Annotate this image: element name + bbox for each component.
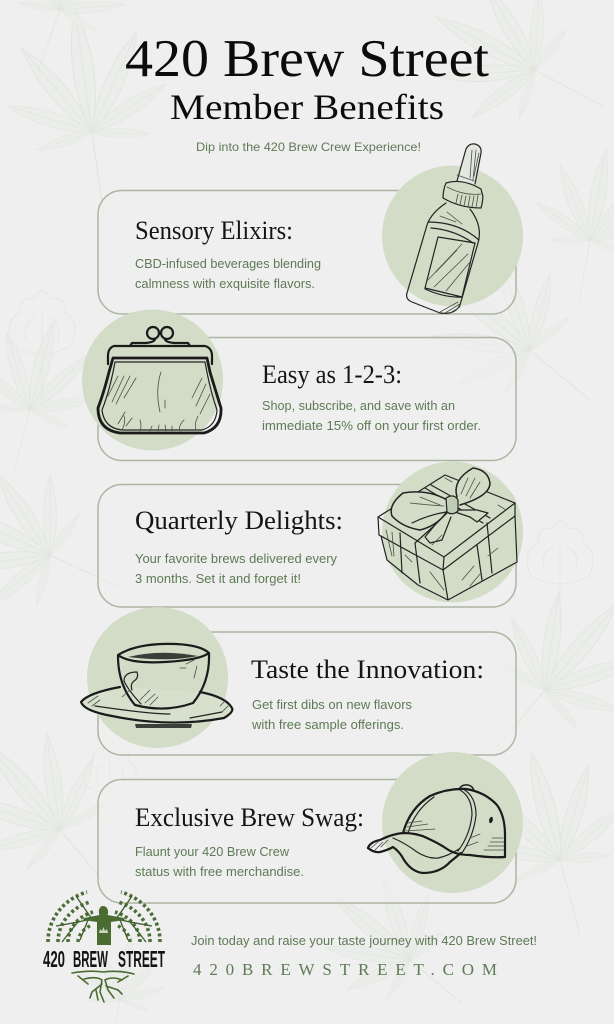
icon circle bbox=[87, 607, 228, 748]
description: with free sample offerings. bbox=[251, 718, 404, 732]
panel: Easy as 1-2-3 bbox=[82, 310, 516, 460]
description: calmness with exquisite flavors. bbox=[135, 277, 315, 291]
card outline bbox=[98, 484, 516, 607]
website url: 420BREWSTREET.COM bbox=[193, 960, 497, 979]
description: CBD-infused beverages blending bbox=[135, 257, 321, 271]
panel: Exclusive Brew Swag bbox=[98, 752, 523, 903]
logo wordmark: STREET bbox=[118, 946, 165, 972]
panel: Quarterly Delights bbox=[98, 462, 523, 607]
icon: coin purse bbox=[98, 327, 221, 433]
tree canopy bbox=[48, 892, 160, 942]
icon circle bbox=[382, 752, 523, 893]
icon: dropper bottle bbox=[407, 144, 483, 313]
heading: Sensory Elixirs: bbox=[135, 216, 293, 245]
card outline bbox=[98, 632, 516, 755]
card outline bbox=[98, 190, 516, 314]
panel: Sensory Elixirs bbox=[98, 144, 523, 314]
description: immediate 15% off on your first order. bbox=[262, 419, 481, 433]
footer call to action: Join today and raise your taste journey with 420 Brew Street! bbox=[191, 934, 537, 948]
description: 3 months. Set it and forget it! bbox=[135, 572, 301, 586]
description: Your favorite brews delivered every bbox=[135, 552, 338, 566]
icon: gift box with bow bbox=[378, 468, 517, 600]
branches bbox=[56, 896, 152, 942]
logo: 420 Brew Street tree bbox=[43, 892, 165, 1002]
icon circle bbox=[82, 310, 223, 450]
card outline bbox=[98, 338, 516, 460]
description: Flaunt your 420 Brew Crew bbox=[135, 845, 290, 859]
subtitle: Member Benefits bbox=[170, 87, 444, 127]
title: 420 Brew Street bbox=[125, 30, 489, 88]
description: Shop, subscribe, and save with an bbox=[262, 399, 455, 413]
heading: Easy as 1-2-3: bbox=[262, 360, 402, 389]
heading: Taste the Innovation: bbox=[251, 655, 484, 684]
description: Get first dibs on new flavors bbox=[252, 698, 412, 712]
icon: baseball cap bbox=[368, 785, 505, 873]
logo wordmark: BREW bbox=[73, 946, 108, 972]
panel: Taste the Innovation bbox=[81, 607, 516, 755]
icon circle bbox=[382, 166, 523, 306]
icon circle bbox=[382, 462, 523, 602]
logo wordmark: 420 bbox=[43, 946, 65, 972]
description: status with free merchandise. bbox=[135, 865, 304, 879]
tagline: Dip into the 420 Brew Crew Experience! bbox=[196, 140, 421, 154]
crown mark bbox=[99, 927, 108, 933]
heading: Quarterly Delights: bbox=[135, 506, 343, 535]
icon: coffee cup and saucer bbox=[81, 644, 232, 728]
heading: Exclusive Brew Swag: bbox=[135, 803, 364, 832]
roots bbox=[72, 971, 134, 1002]
card outline bbox=[98, 780, 516, 903]
figure trunk bbox=[83, 906, 125, 945]
